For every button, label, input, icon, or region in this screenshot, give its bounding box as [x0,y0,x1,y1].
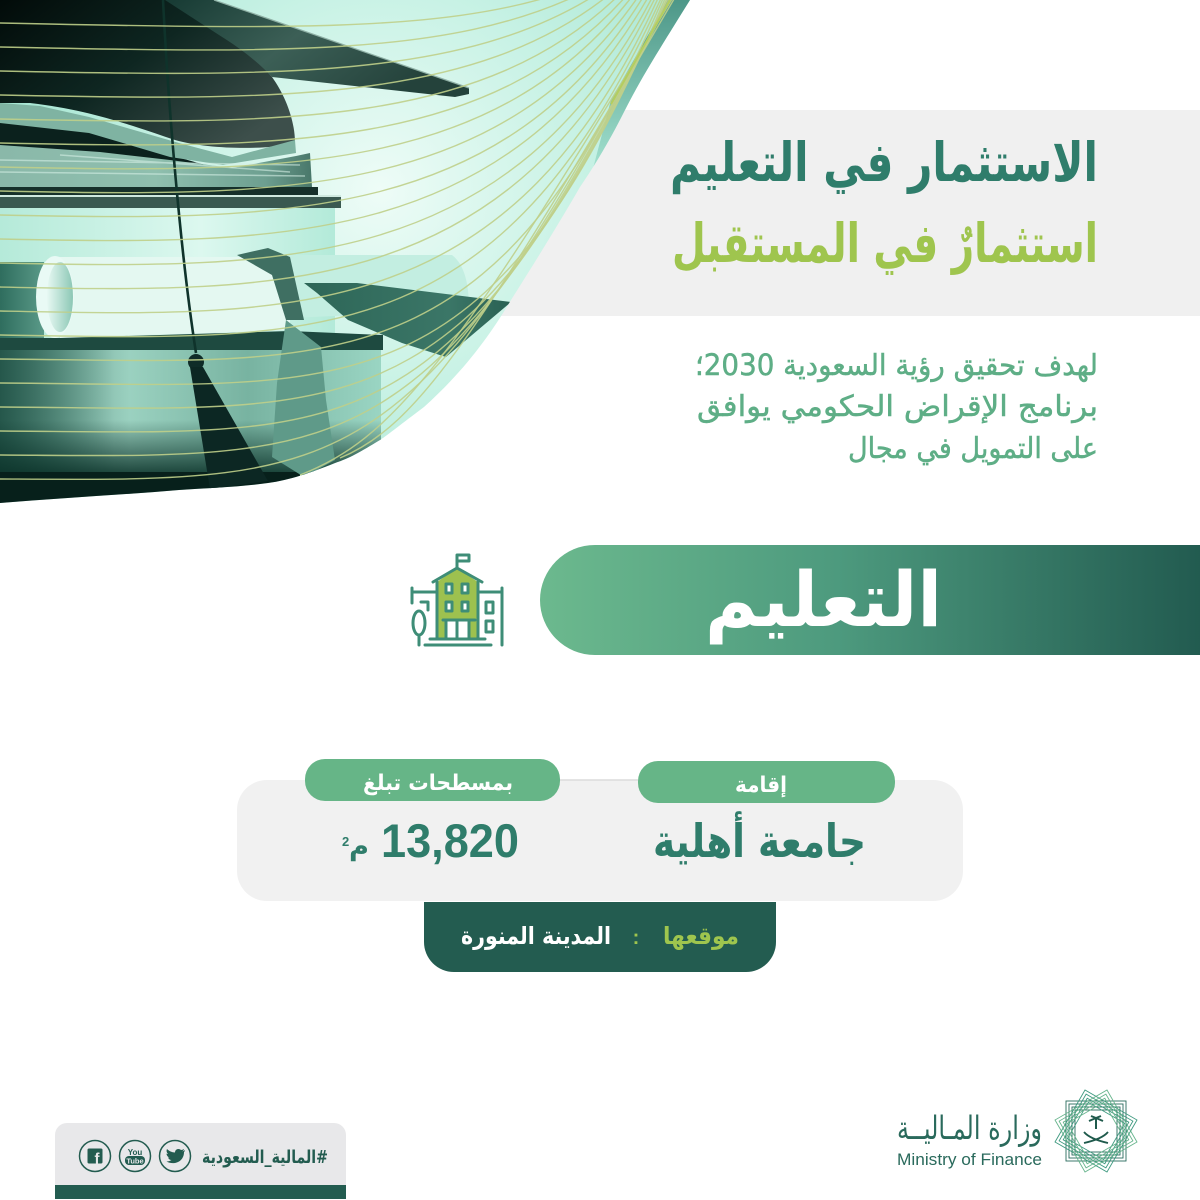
pill: establishment label [638,761,895,803]
intro paragraph: برنامج الإقراض الحكومي يوافق [697,389,1098,424]
icon: youtube: Tube [126,1156,144,1166]
intro paragraph: على التمويل في مجال [848,431,1098,466]
hashtag: #المالية_السعودية [202,1147,328,1168]
logo wordmark english: Ministry of Finance [897,1150,1042,1169]
title heading [670,131,1098,275]
logo emblem [1055,1090,1137,1172]
sector banner [540,545,1200,655]
pill: establishment label: إقامة [735,773,787,798]
panel: project details [237,759,963,901]
location tab: المدينة المنورة [461,922,611,950]
icon: facebook [80,1140,110,1172]
icon: youtube [120,1140,150,1172]
fanning curved lines [0,0,677,479]
pill: area label [305,759,560,801]
icon: youtube: You [128,1148,142,1157]
intro paragraph [695,348,1098,466]
logo wordmark arabic: وزارة المـاليــة [897,1109,1042,1147]
value: area: م [349,832,369,862]
icon: school building [412,555,502,645]
grey title band [500,110,1200,316]
footer social bar [55,1123,346,1199]
icon: facebook: f [94,1150,100,1168]
intro paragraph: لهدف تحقيق رؤية السعودية 2030؛ [695,348,1098,382]
value: area: 13,820 [381,814,519,867]
value: private university: جامعة أهلية [653,811,866,868]
location tab: موقعها [663,922,739,950]
logo: ministry of finance [897,1090,1137,1172]
value: area: 2 [342,834,349,849]
hero photo: graduation cap, books and diploma [0,0,700,510]
location tab [424,902,776,972]
location tab: : [633,927,639,949]
sector banner: التعليم [705,555,942,645]
icon: twitter [160,1140,190,1172]
pill: area label: بمسطحات تبلغ [363,771,513,796]
